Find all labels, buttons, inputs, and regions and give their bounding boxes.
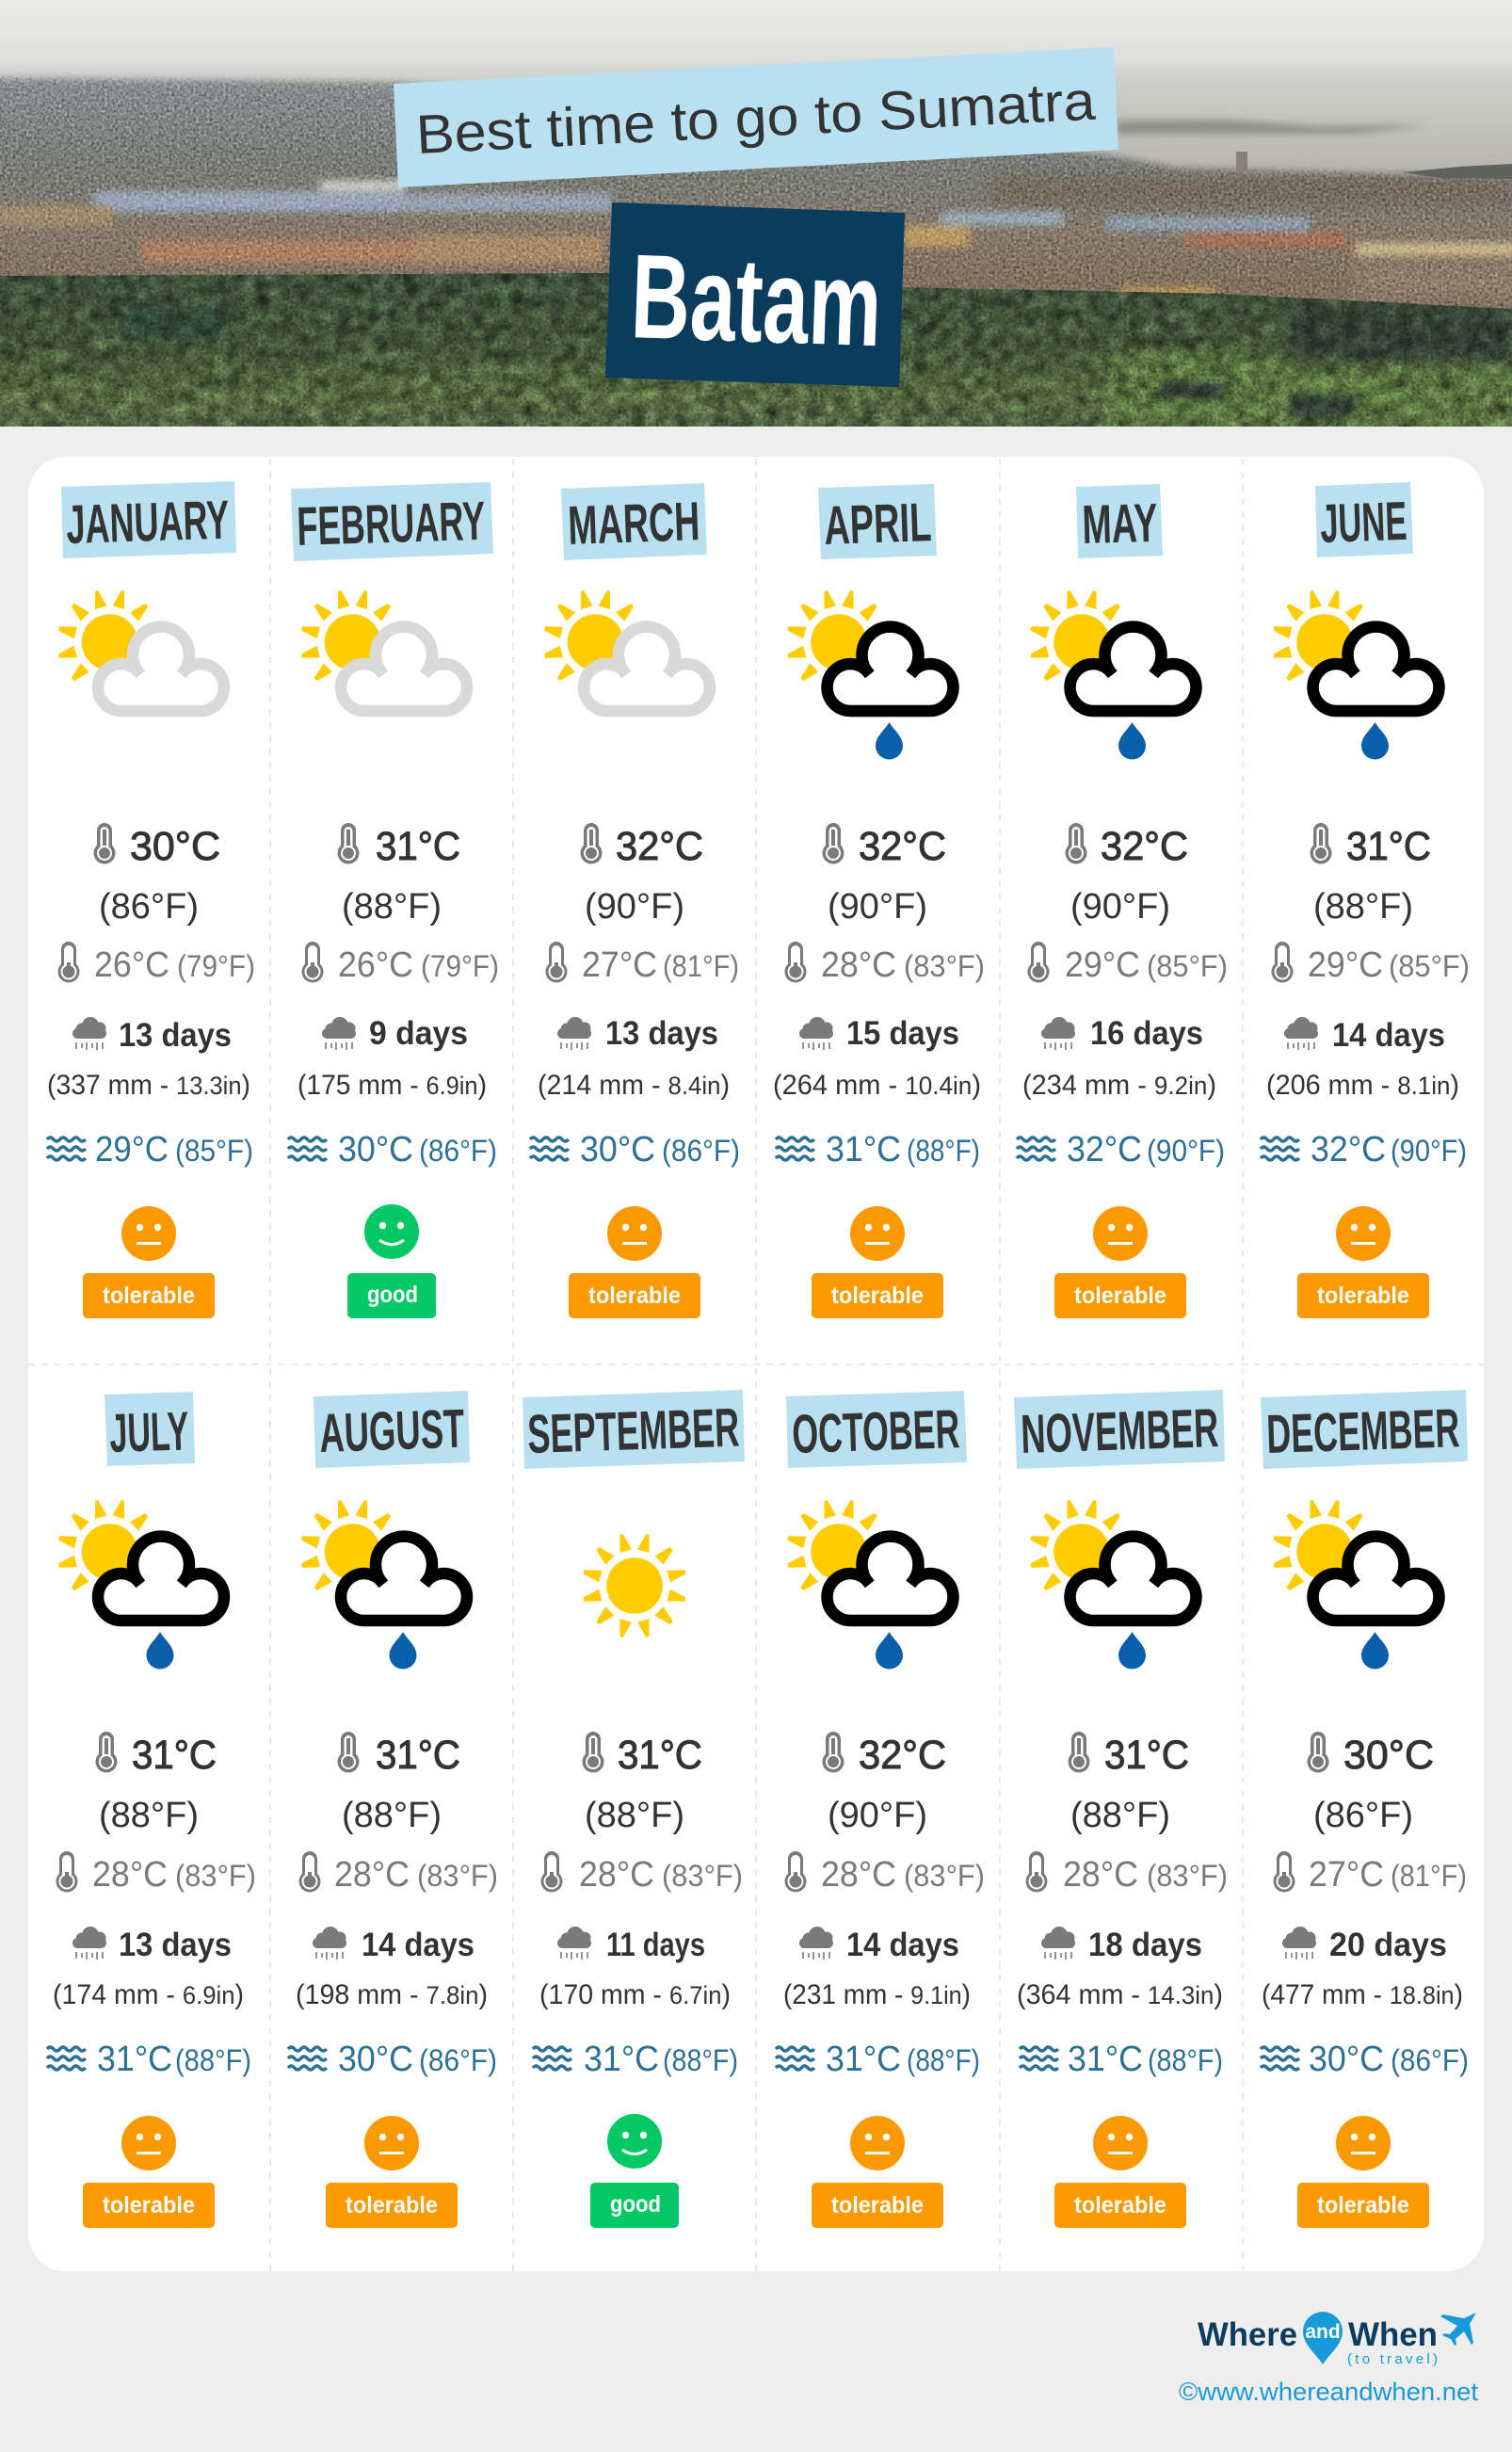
month label: March: MARCH (567, 491, 700, 557)
minimum temperature (299, 1851, 498, 1895)
rating: tolerable: tolerable (103, 1282, 195, 1309)
rainfall (47, 1017, 250, 1101)
minimum temperature: (79°F) (177, 949, 255, 983)
rating: tolerable: tolerable (588, 1282, 681, 1309)
month label: November (1014, 1390, 1225, 1469)
minimum temperature: (85°F) (1389, 949, 1470, 983)
rating: tolerable (812, 2116, 943, 2228)
minimum temperature: 27°C (582, 945, 657, 985)
rainfall (53, 1927, 244, 2010)
panel: July (47, 1392, 256, 2228)
month label: August: AUGUST (318, 1398, 465, 1464)
sea temperature (530, 1130, 740, 1170)
panel: monthly climate card (28, 457, 1484, 2271)
sea temperature (1020, 2040, 1223, 2079)
rainfall: (214 mm - 8.4in) (538, 1070, 730, 1101)
month label: January: JANUARY (65, 490, 230, 556)
maximum temperature: (90°F) (828, 1796, 927, 1835)
logo: Where and When to travel (1198, 2312, 1476, 2367)
icon: sun, cloud and rain drop (58, 1500, 224, 1669)
icon: sun and cloud (544, 590, 710, 711)
maximum temperature (94, 823, 220, 927)
month label: July (105, 1392, 195, 1466)
rainfall (298, 1015, 487, 1101)
minimum temperature: (83°F) (1147, 1859, 1228, 1893)
minimum temperature: 28°C (92, 1855, 168, 1895)
maximum temperature (337, 1732, 460, 1835)
panel: September (523, 1390, 745, 2228)
sea temperature: (86°F) (1391, 2043, 1469, 2077)
rainfall: 13 days (119, 1927, 232, 1963)
maximum temperature: (88°F) (342, 887, 442, 927)
maximum temperature: 32°C (859, 824, 946, 869)
maximum temperature: (90°F) (1070, 887, 1170, 927)
maximum temperature (337, 823, 460, 927)
minimum temperature (1273, 1851, 1467, 1895)
sea temperature: 31°C (826, 2040, 901, 2079)
panel: May (1017, 484, 1228, 1318)
minimum temperature: 28°C (821, 1855, 896, 1895)
sea temperature: 32°C (1067, 1130, 1142, 1170)
maximum temperature: 31°C (132, 1733, 217, 1778)
sea temperature: (88°F) (907, 2043, 980, 2077)
rainfall: 14 days (846, 1927, 959, 1963)
minimum temperature: 28°C (579, 1855, 654, 1895)
rating: tolerable (569, 1206, 700, 1318)
rating: tolerable (1297, 1206, 1429, 1318)
rating: tolerable (812, 1206, 943, 1318)
sea temperature (776, 2040, 980, 2079)
rainfall: (364 mm - 14.3in) (1017, 1979, 1223, 2010)
minimum temperature: (83°F) (662, 1859, 743, 1893)
month label: June (1315, 482, 1413, 557)
rating: tolerable: tolerable (1317, 2192, 1409, 2218)
maximum temperature: 32°C (1101, 824, 1188, 869)
icon: sun (584, 1534, 685, 1637)
maximum temperature (1307, 1732, 1434, 1835)
rainfall: (337 mm - 13.3in) (47, 1070, 250, 1101)
minimum temperature: (81°F) (663, 949, 739, 983)
maximum temperature: (88°F) (99, 1796, 199, 1835)
logo: Where and When to travel: Where (1198, 2316, 1297, 2353)
minimum temperature: 26°C (338, 945, 413, 985)
sea temperature: (88°F) (663, 2043, 738, 2077)
minimum temperature (1028, 942, 1228, 985)
month label: November: NOVEMBER (1020, 1397, 1219, 1465)
maximum temperature (96, 1732, 217, 1835)
rainfall: (231 mm - 9.1in) (783, 1979, 971, 2010)
month label: September: SEPTEMBER (526, 1397, 740, 1465)
month label: April (818, 484, 937, 559)
title banner: Best time to go to Sumatra (414, 70, 1098, 166)
month label: May (1076, 484, 1163, 558)
rainfall: 13 days (119, 1017, 232, 1054)
maximum temperature (1311, 823, 1431, 927)
sea temperature: (88°F) (1148, 2043, 1223, 2077)
maximum temperature: (88°F) (1070, 1796, 1170, 1835)
rainfall (538, 1015, 730, 1101)
minimum temperature (785, 942, 985, 985)
icon: sun, cloud and rain drop (1274, 590, 1439, 759)
rainfall (1262, 1927, 1463, 2010)
minimum temperature: (85°F) (1147, 949, 1228, 983)
maximum temperature: (88°F) (1313, 887, 1413, 927)
rainfall: 14 days (1332, 1017, 1445, 1054)
rainfall: (198 mm - 7.8in) (296, 1979, 488, 2010)
sea temperature: 30°C (1309, 2040, 1384, 2079)
rainfall: 20 days (1329, 1927, 1447, 1963)
minimum temperature (546, 942, 739, 985)
sea temperature: 30°C (580, 1130, 655, 1170)
rainfall (1266, 1017, 1459, 1101)
minimum temperature (58, 942, 255, 985)
rainfall: (174 mm - 6.9in) (53, 1979, 244, 2010)
logo: Where and When to travel: and (1305, 2321, 1341, 2343)
sea temperature: (88°F) (175, 2043, 251, 2077)
month label: February: FEBRUARY (296, 491, 486, 557)
rainfall (539, 1927, 731, 2010)
sea temperature: 31°C (1068, 2040, 1143, 2079)
rainfall (783, 1927, 971, 2010)
minimum temperature: 29°C (1308, 945, 1383, 985)
icon: sun, cloud and rain drop (788, 590, 953, 759)
month label: February (291, 482, 493, 561)
minimum temperature: (83°F) (904, 1859, 985, 1893)
minimum temperature (56, 1851, 256, 1895)
rainfall (296, 1927, 488, 2010)
maximum temperature: (86°F) (1313, 1796, 1413, 1835)
rating: good: good (610, 2191, 661, 2218)
minimum temperature: 27°C (1309, 1855, 1384, 1895)
rainfall: 14 days (362, 1927, 475, 1963)
sea temperature: 31°C (826, 1130, 901, 1170)
maximum temperature: (90°F) (828, 887, 927, 927)
rating: tolerable: tolerable (1074, 2192, 1166, 2218)
maximum temperature: (90°F) (585, 887, 684, 927)
rainfall: (477 mm - 18.8in) (1262, 1979, 1463, 2010)
rainfall (1022, 1015, 1216, 1101)
panel: November (1014, 1390, 1228, 2228)
rainfall (773, 1015, 981, 1101)
rating: tolerable: tolerable (346, 2192, 438, 2218)
sea temperature: (86°F) (419, 1134, 497, 1168)
city name banner: Batam (629, 229, 884, 371)
month label: August (314, 1391, 470, 1468)
rating: tolerable: tolerable (1074, 1282, 1166, 1309)
month label: January (61, 481, 236, 558)
rainfall (1017, 1927, 1223, 2010)
minimum temperature (1026, 1851, 1228, 1895)
sea temperature: 29°C (95, 1130, 169, 1170)
rating: tolerable (1054, 1206, 1186, 1318)
maximum temperature: (86°F) (99, 887, 199, 927)
minimum temperature: 29°C (1065, 945, 1140, 985)
minimum temperature: (83°F) (417, 1859, 498, 1893)
rainfall: 11 days (606, 1927, 705, 1963)
sea temperature: (90°F) (1391, 1134, 1467, 1168)
rainfall: 15 days (846, 1015, 959, 1052)
sea temperature: 31°C (97, 2040, 172, 2079)
sea temperature: 32°C (1311, 1130, 1386, 1170)
icon: sun and cloud (301, 590, 467, 711)
icon: sun, cloud and rain drop (1031, 1500, 1196, 1669)
rainfall: (175 mm - 6.9in) (298, 1070, 487, 1101)
sea temperature: 31°C (584, 2040, 659, 2079)
month label: July: JULY (108, 1400, 189, 1464)
icon: sun, cloud and rain drop (1274, 1500, 1439, 1669)
maximum temperature: 30°C (1343, 1733, 1434, 1778)
maximum temperature (582, 1732, 702, 1835)
month label: September (523, 1390, 745, 1469)
maximum temperature (580, 823, 703, 927)
sea temperature: 30°C (338, 2040, 413, 2079)
sea temperature: (88°F) (907, 1134, 980, 1168)
minimum temperature: (81°F) (1391, 1859, 1467, 1893)
sea temperature: (85°F) (175, 1134, 253, 1168)
sea temperature (288, 1130, 497, 1170)
rating: tolerable (83, 1206, 215, 1318)
rating: tolerable: tolerable (103, 2192, 195, 2218)
sea temperature: (90°F) (1147, 1134, 1225, 1168)
sea temperature: (86°F) (419, 2043, 497, 2077)
maximum temperature (823, 1732, 946, 1835)
maximum temperature: 31°C (618, 1733, 702, 1778)
rating: tolerable (326, 2116, 458, 2228)
maximum temperature: 31°C (1104, 1733, 1189, 1778)
minimum temperature (1271, 942, 1470, 985)
maximum temperature: (88°F) (585, 1796, 684, 1835)
minimum temperature: (79°F) (421, 949, 499, 983)
panel: August (288, 1391, 498, 2228)
minimum temperature: 28°C (1063, 1855, 1138, 1895)
panel: October (776, 1391, 985, 2228)
icon: sun, cloud and rain drop (301, 1500, 467, 1669)
rating: good (590, 2114, 679, 2228)
month label: October: OCTOBER (791, 1398, 960, 1465)
minimum temperature: (83°F) (904, 949, 985, 983)
maximum temperature: 32°C (616, 824, 703, 869)
minimum temperature (785, 1851, 985, 1895)
sea temperature (533, 2040, 738, 2079)
minimum temperature: 28°C (821, 945, 896, 985)
city name banner (605, 202, 905, 387)
rainfall: (206 mm - 8.1in) (1266, 1070, 1459, 1101)
maximum temperature: (88°F) (342, 1796, 442, 1835)
month label: October (786, 1391, 967, 1468)
sea temperature: 30°C (338, 1130, 413, 1170)
minimum temperature (301, 942, 499, 985)
rainfall: 16 days (1090, 1015, 1203, 1052)
month label: May: MAY (1082, 492, 1158, 556)
month label: April: APRIL (823, 492, 932, 557)
sea temperature (47, 1130, 253, 1170)
rating: tolerable (1297, 2116, 1429, 2228)
maximum temperature: 32°C (859, 1733, 946, 1778)
sea temperature (1261, 1130, 1467, 1170)
rainfall: (264 mm - 10.4in) (773, 1070, 981, 1101)
sea temperature (1017, 1130, 1225, 1170)
rating: tolerable: tolerable (1317, 1282, 1409, 1309)
title banner (394, 47, 1118, 187)
minimum temperature: (83°F) (175, 1859, 256, 1893)
rainfall: 18 days (1088, 1927, 1202, 1963)
maximum temperature: 31°C (376, 1733, 460, 1778)
month label: March (561, 483, 707, 560)
logo: Where and When to travel: When (1348, 2316, 1438, 2353)
rating: tolerable: tolerable (831, 2192, 924, 2218)
icon: sun, cloud and rain drop (788, 1500, 953, 1669)
rating: tolerable (1054, 2116, 1186, 2228)
panel: March (530, 483, 740, 1318)
logo: Where and When to travel: (to travel) (1347, 2351, 1438, 2367)
rainfall: 9 days (369, 1015, 468, 1052)
maximum temperature (1068, 1732, 1189, 1835)
maximum temperature: 30°C (130, 824, 220, 869)
panel: June (1261, 482, 1470, 1318)
maximum temperature (823, 823, 946, 927)
sea temperature: (86°F) (662, 1134, 740, 1168)
rainfall: 13 days (605, 1015, 718, 1052)
hero photo: aerial view of Batam (0, 0, 1512, 427)
panel: December (1261, 1390, 1469, 2228)
minimum temperature: 28°C (334, 1855, 410, 1895)
panel: February (288, 482, 499, 1318)
sea temperature (1261, 2040, 1469, 2079)
maximum temperature: 31°C (1346, 824, 1431, 869)
icon: sun and cloud (58, 590, 224, 711)
rating: tolerable: tolerable (831, 1282, 924, 1309)
website credit: ©www.whereandwhen.net (1179, 2378, 1478, 2406)
month label: June: JUNE (1319, 491, 1407, 555)
rating: good: good (367, 1282, 418, 1308)
maximum temperature (1066, 823, 1188, 927)
panel: January (47, 481, 255, 1318)
sea temperature (288, 2040, 497, 2079)
minimum temperature: 26°C (94, 945, 169, 985)
rainfall: (170 mm - 6.7in) (539, 1979, 731, 2010)
rainfall: (234 mm - 9.2in) (1022, 1070, 1216, 1101)
sea temperature (776, 1130, 980, 1170)
panel: April (773, 484, 985, 1318)
sea temperature (47, 2040, 251, 2079)
rating: good (347, 1204, 436, 1318)
rating: tolerable (83, 2116, 215, 2228)
maximum temperature: 31°C (376, 824, 460, 869)
minimum temperature (540, 1851, 743, 1895)
icon: sun, cloud and rain drop (1031, 590, 1196, 759)
